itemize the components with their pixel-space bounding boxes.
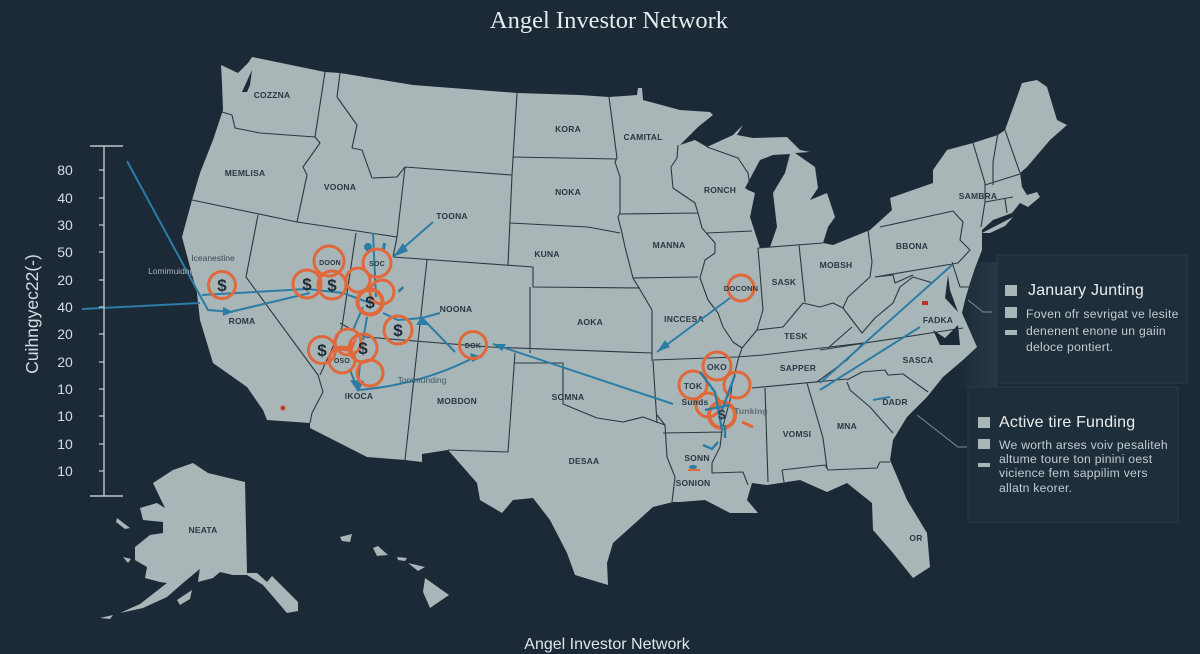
- state labels: IKOCA: [345, 391, 373, 401]
- investor markers: west cluster: $: [327, 276, 337, 295]
- investor markers: west cluster: DOK: [465, 343, 481, 350]
- panel: January funding: denenent enone un gaiin: [1026, 324, 1166, 338]
- panel: January funding: January Junting: [1028, 282, 1144, 299]
- state labels: KORA: [555, 124, 581, 134]
- y-axis: 40: [57, 299, 73, 315]
- state labels: SASK: [772, 277, 797, 287]
- investor markers: central cluster: DOCONN: [724, 284, 758, 293]
- arrows: funding flows: [82, 161, 952, 404]
- panel: Active funding: allatn keorer.: [999, 481, 1072, 495]
- state labels: VOONA: [324, 182, 356, 192]
- state labels: RONCH: [704, 185, 736, 195]
- y-axis: 20: [57, 272, 73, 288]
- y-axis title: Cuihngyec22(-): [22, 254, 42, 374]
- title: Angel Investor Network: [490, 7, 729, 34]
- y-axis: 80: [57, 162, 73, 178]
- y-axis: 10: [57, 463, 73, 479]
- panel: Active funding: altume toure ton pinini oest: [999, 452, 1153, 466]
- investor markers: west cluster: DOON: [319, 260, 341, 267]
- state labels: MOBDON: [437, 396, 477, 406]
- y-axis: 10: [57, 436, 73, 452]
- investor markers: west cluster: [208, 246, 486, 386]
- state labels: AOKA: [577, 317, 603, 327]
- state labels: DESAA: [569, 456, 599, 466]
- investor markers: central cluster: OKO: [707, 362, 727, 372]
- map annotations: Iceanestine: [191, 253, 235, 263]
- investor markers: west cluster: $: [393, 321, 403, 340]
- state labels: SASCA: [903, 355, 933, 365]
- investor markers: west cluster: $: [365, 293, 375, 312]
- state labels: SONION: [676, 478, 710, 488]
- state labels: KUNA: [534, 249, 560, 259]
- state labels: BBONA: [896, 241, 928, 251]
- state labels: FADKA: [923, 315, 953, 325]
- y-axis: 40: [57, 190, 73, 206]
- state labels: CAMITAL: [623, 132, 663, 142]
- map: Alaska: [100, 463, 298, 619]
- panel: Active funding: Active tire Funding: [999, 414, 1135, 431]
- state labels: VOMSI: [783, 429, 811, 439]
- state labels: NEATA: [188, 525, 218, 535]
- state labels: MANNA: [653, 240, 685, 250]
- y-axis: 50: [57, 244, 73, 260]
- panel: January funding: deloce pontiert.: [1026, 340, 1113, 354]
- state labels: MEMLISA: [225, 168, 265, 178]
- investor markers: west cluster: $: [358, 339, 368, 358]
- small marker: [281, 406, 285, 410]
- state labels: [188, 90, 997, 543]
- map annotations: Lomimuidnger: [148, 266, 202, 276]
- footer caption: Angel Investor Network: [524, 636, 691, 653]
- state labels: INCCESA: [664, 314, 704, 324]
- map: Hawaii: [340, 534, 449, 608]
- state labels: DADR: [882, 397, 908, 407]
- y-axis: 10: [57, 408, 73, 424]
- state labels: ROMA: [229, 316, 255, 326]
- map annotations: [148, 253, 447, 385]
- panel: Active funding: [917, 387, 1178, 522]
- state labels: TOONA: [436, 211, 468, 221]
- panel: January funding: [968, 255, 1187, 383]
- map: Long Island: [982, 217, 1013, 233]
- state labels: NOONA: [440, 304, 472, 314]
- state labels: TESK: [784, 331, 808, 341]
- panel: Active funding: vicience fem sappilim vers: [999, 466, 1148, 480]
- investor markers: west cluster: SOC: [369, 261, 385, 268]
- map: contiguous United States: [182, 57, 1067, 585]
- investor markers: central cluster: [679, 275, 768, 470]
- panel: Active funding: We worth arses voiv pesaliteh: [999, 438, 1168, 452]
- state labels: COZZNA: [254, 90, 290, 100]
- investor markers: central cluster: Tunking: [734, 406, 768, 416]
- map annotations: Tommunding: [398, 375, 447, 385]
- state labels: SAPPER: [780, 363, 816, 373]
- state labels: SAMBRA: [959, 191, 997, 201]
- investor markers: central cluster: TOK: [684, 381, 703, 391]
- investor markers: central cluster: Sunds: [682, 397, 709, 407]
- investor markers: west cluster: OSO: [334, 358, 350, 365]
- small marker: Virginia: [922, 301, 928, 305]
- panel: January funding: Foven ofr sevrigat ve lesite: [1026, 307, 1179, 321]
- state labels: MNA: [837, 421, 857, 431]
- y-axis: 20: [57, 354, 73, 370]
- glow behind panel: [955, 262, 997, 387]
- y-axis: [57, 146, 123, 496]
- state labels: OR: [909, 533, 923, 543]
- investor markers: west cluster: $: [217, 276, 227, 295]
- investor markers: west cluster: $: [317, 341, 327, 360]
- investor markers: west cluster: $: [302, 275, 312, 294]
- state labels: MOBSH: [820, 260, 852, 270]
- state labels: NOKA: [555, 187, 581, 197]
- investor markers: central cluster: $: [718, 407, 726, 422]
- y-axis: 20: [57, 326, 73, 342]
- y-axis: 10: [57, 381, 73, 397]
- state labels: SOMNA: [552, 392, 584, 402]
- y-axis: 30: [57, 217, 73, 233]
- state labels: SONN: [684, 453, 710, 463]
